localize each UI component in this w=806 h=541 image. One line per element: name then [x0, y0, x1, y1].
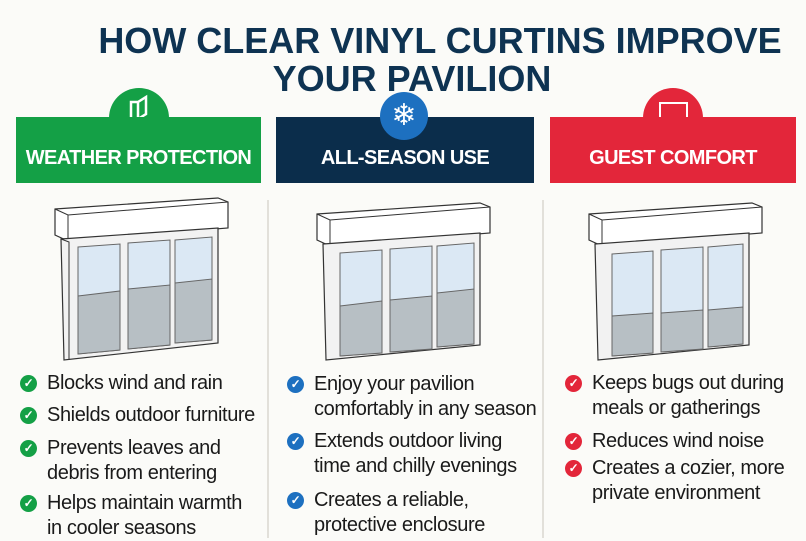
bullets: weather protection: in cooler seasons	[47, 517, 196, 539]
illustration: window 2	[316, 202, 491, 361]
bullets: weather protection: ✓	[24, 376, 33, 390]
title: HOW CLEAR VINYL CURTINS IMPROVE	[98, 20, 782, 61]
icon tab: window	[643, 88, 703, 148]
bullets: all-season: Enjoy your pavilion	[314, 373, 474, 395]
bullets: weather protection	[20, 372, 255, 539]
bullets: all-season: Extends outdoor living	[314, 430, 502, 452]
bullets: guest comfort: private environment	[592, 482, 760, 504]
bullets: all-season: protective enclosure	[314, 514, 485, 536]
bullets: guest comfort: ✓	[569, 376, 578, 390]
bullets: all-season: Creates a reliable,	[314, 489, 469, 511]
bullets: all-season	[287, 373, 536, 536]
title: YOUR PAVILION	[273, 58, 551, 99]
bullets: guest comfort: Keeps bugs out during	[592, 372, 784, 394]
bullets: all-season: ✓	[291, 434, 300, 448]
bullets: guest comfort: Reduces wind noise	[592, 430, 764, 452]
bullets: guest comfort: ✓	[569, 461, 578, 475]
heading	[276, 117, 534, 183]
panel: guest comfort header	[550, 88, 796, 183]
icon: snowflake: ❄	[391, 99, 417, 132]
icon: snowflake	[380, 92, 428, 140]
illustration: window 1	[54, 197, 229, 361]
heading	[550, 117, 796, 183]
bullets: all-season: ✓	[291, 493, 300, 507]
icon tab: door	[109, 88, 169, 148]
bullets: weather protection: Shields outdoor furniture	[47, 404, 255, 426]
panel: all-season header	[276, 92, 534, 183]
bullets: weather protection: ✓	[24, 496, 33, 510]
heading	[16, 117, 261, 183]
bullets: weather protection: Prevents leaves and	[47, 437, 221, 459]
bullets: guest comfort: Creates a cozier, more	[592, 457, 784, 479]
panel: weather protection header	[16, 88, 261, 183]
title	[98, 20, 782, 99]
bullets: weather protection: debris from entering	[47, 462, 217, 484]
bullets: weather protection: Helps maintain warmth	[47, 492, 242, 514]
bullets: weather protection: ✓	[24, 441, 33, 455]
heading: GUEST COMFORT	[589, 147, 757, 169]
illustration: window 3	[588, 202, 763, 361]
bullets: all-season: time and chilly evenings	[314, 455, 517, 477]
heading: ALL-SEASON USE	[321, 147, 489, 169]
bullets: weather protection: Blocks wind and rain	[47, 372, 222, 394]
bullets: all-season: ✓	[291, 377, 300, 391]
bullets: all-season: comfortably in any season	[314, 398, 536, 420]
bullets: guest comfort	[565, 372, 784, 504]
bullets: guest comfort: meals or gatherings	[592, 397, 760, 419]
heading: WEATHER PROTECTION	[26, 147, 251, 169]
bullets: guest comfort: ✓	[569, 434, 578, 448]
bullets: weather protection: ✓	[24, 408, 33, 422]
